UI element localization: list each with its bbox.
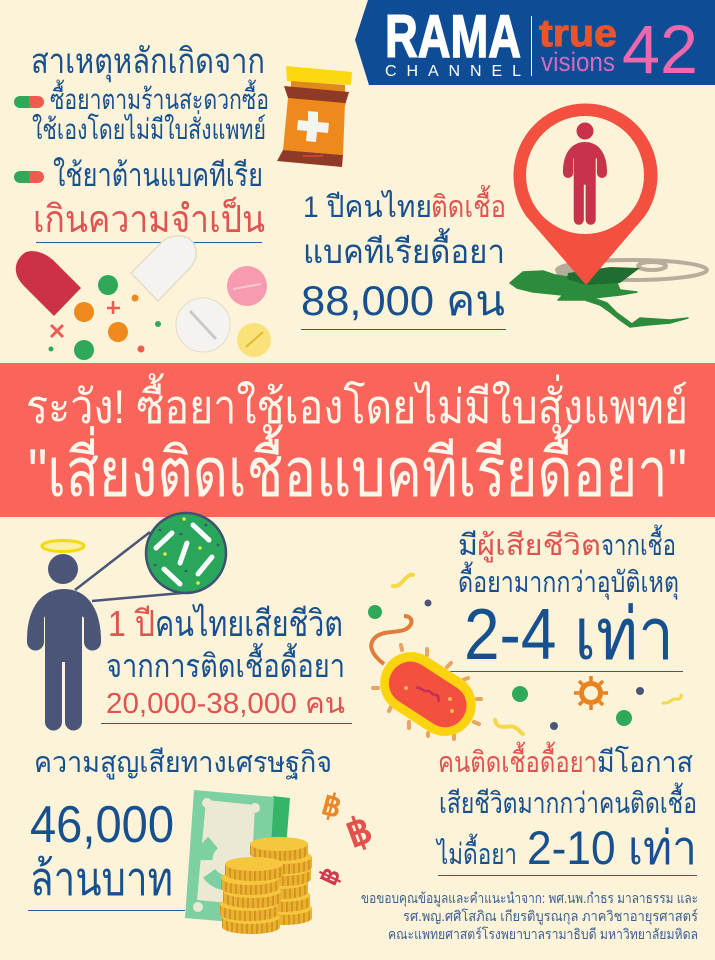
pill: white capsule xyxy=(131,236,196,301)
location pin xyxy=(513,103,658,285)
text block: deaths per year: 1 ปี xyxy=(108,603,155,644)
banknote xyxy=(185,790,290,925)
logo: true visions xyxy=(539,13,617,77)
decorative germs xyxy=(368,575,681,734)
text block: deaths per year: คนไทยเสียชีวิต xyxy=(155,603,343,644)
text block: infected per year: แบคทีเรียดื้อยา xyxy=(303,228,505,270)
coin stacks xyxy=(220,837,312,934)
text block: deaths per year xyxy=(106,603,345,720)
text block: mortality chance: คนติดเชื้อดื้อยา xyxy=(438,741,597,779)
shadow rings xyxy=(556,260,707,280)
red warning band xyxy=(0,363,715,517)
text block: credits: รศ.พญ.ศศิโสภิณ เกียรติบูรณกุล ภาควิชาอายุรศาสตร์ xyxy=(403,908,698,925)
header banner xyxy=(355,0,715,88)
logo: RAMA Channel xyxy=(385,3,521,80)
channel number 42: 42 xyxy=(622,11,698,88)
text block: economic loss: ความสูญเสียทางเศรษฐกิจ xyxy=(34,747,332,780)
pill: pink tablet xyxy=(227,266,267,306)
icon: banknotes and coins xyxy=(185,790,312,934)
text block: deaths vs accidents: 2-4 เท่า xyxy=(464,595,674,675)
icon: gear germ xyxy=(574,676,608,710)
person xyxy=(27,554,101,730)
icon: bacterium xyxy=(368,616,488,748)
text block: deaths per year: จากการติดเชื้อดื้อยา xyxy=(106,643,345,684)
icon: baht symbols: ฿ xyxy=(341,809,378,856)
icon: medicine bottle xyxy=(277,66,352,167)
halo xyxy=(42,540,84,552)
icon: baht symbols: ฿ xyxy=(314,863,346,890)
bacteria circle xyxy=(146,513,226,593)
logo: true visions: visions xyxy=(541,47,615,77)
text block: infected per year: 1 ปีคนไทย xyxy=(303,189,432,224)
text block: infected per year xyxy=(301,185,506,324)
text block: economic loss: ล้านบาท xyxy=(30,852,173,905)
logo: true visions: true xyxy=(539,13,617,55)
text block: infected per year: 88,000 คน xyxy=(301,277,505,324)
pill: white tablet xyxy=(176,298,230,352)
text block: main causes xyxy=(14,42,269,241)
text block: main causes: ใช้เองโดยไม่มีใบสั่งแพทย์ xyxy=(32,110,266,145)
icon: deceased person with bacteria magnifier xyxy=(27,513,226,730)
text block: mortality chance xyxy=(435,741,697,874)
icon: baht symbols: ฿ xyxy=(318,788,345,825)
logo: RAMA Channel: CHANNEL xyxy=(385,63,521,80)
text block: deaths vs accidents: จากเชื้อ xyxy=(601,524,676,562)
text block: economic loss: 46,000 xyxy=(30,796,174,854)
text block: deaths vs accidents: ผู้เสียชีวิต xyxy=(477,530,601,563)
text block: main causes: ซื้อยาตามร้านสะดวกซื้อ xyxy=(50,79,269,115)
icon: baht symbols xyxy=(314,788,378,890)
text block: deaths vs accidents: มี xyxy=(458,530,478,562)
text block: main causes: เกินความจำเป็น xyxy=(33,196,265,241)
text block: credits xyxy=(361,890,698,942)
pill: yellow tablet xyxy=(237,323,271,357)
text block: economic loss xyxy=(30,747,332,905)
map xyxy=(510,270,688,327)
icon: capsule bullet 1 xyxy=(14,96,44,108)
text block: main causes: ใช้ยาต้านแบคทีเรีย xyxy=(53,157,263,193)
text block: mortality chance: 2-10 เท่า xyxy=(527,821,697,874)
logo: RAMA Channel: RAMA xyxy=(385,3,521,70)
text block: deaths per year: 20,000-38,000 คน xyxy=(106,688,345,720)
text block: mortality chance: มีโอกาส xyxy=(597,745,693,779)
pill: red capsule xyxy=(16,251,81,316)
person in pin xyxy=(563,122,607,225)
text block: infected per year: ติดเชื้อ xyxy=(431,185,506,224)
icon: map of Thailand with location pin xyxy=(510,103,707,327)
icon: capsule bullet 2 xyxy=(14,171,44,183)
text block: mortality chance: ไม่ดื้อยา xyxy=(435,833,517,871)
text block: main causes: สาเหตุหลักเกิดจาก xyxy=(31,42,265,82)
icon: scattered pills xyxy=(16,236,271,360)
text block: deaths vs accidents xyxy=(458,524,679,675)
